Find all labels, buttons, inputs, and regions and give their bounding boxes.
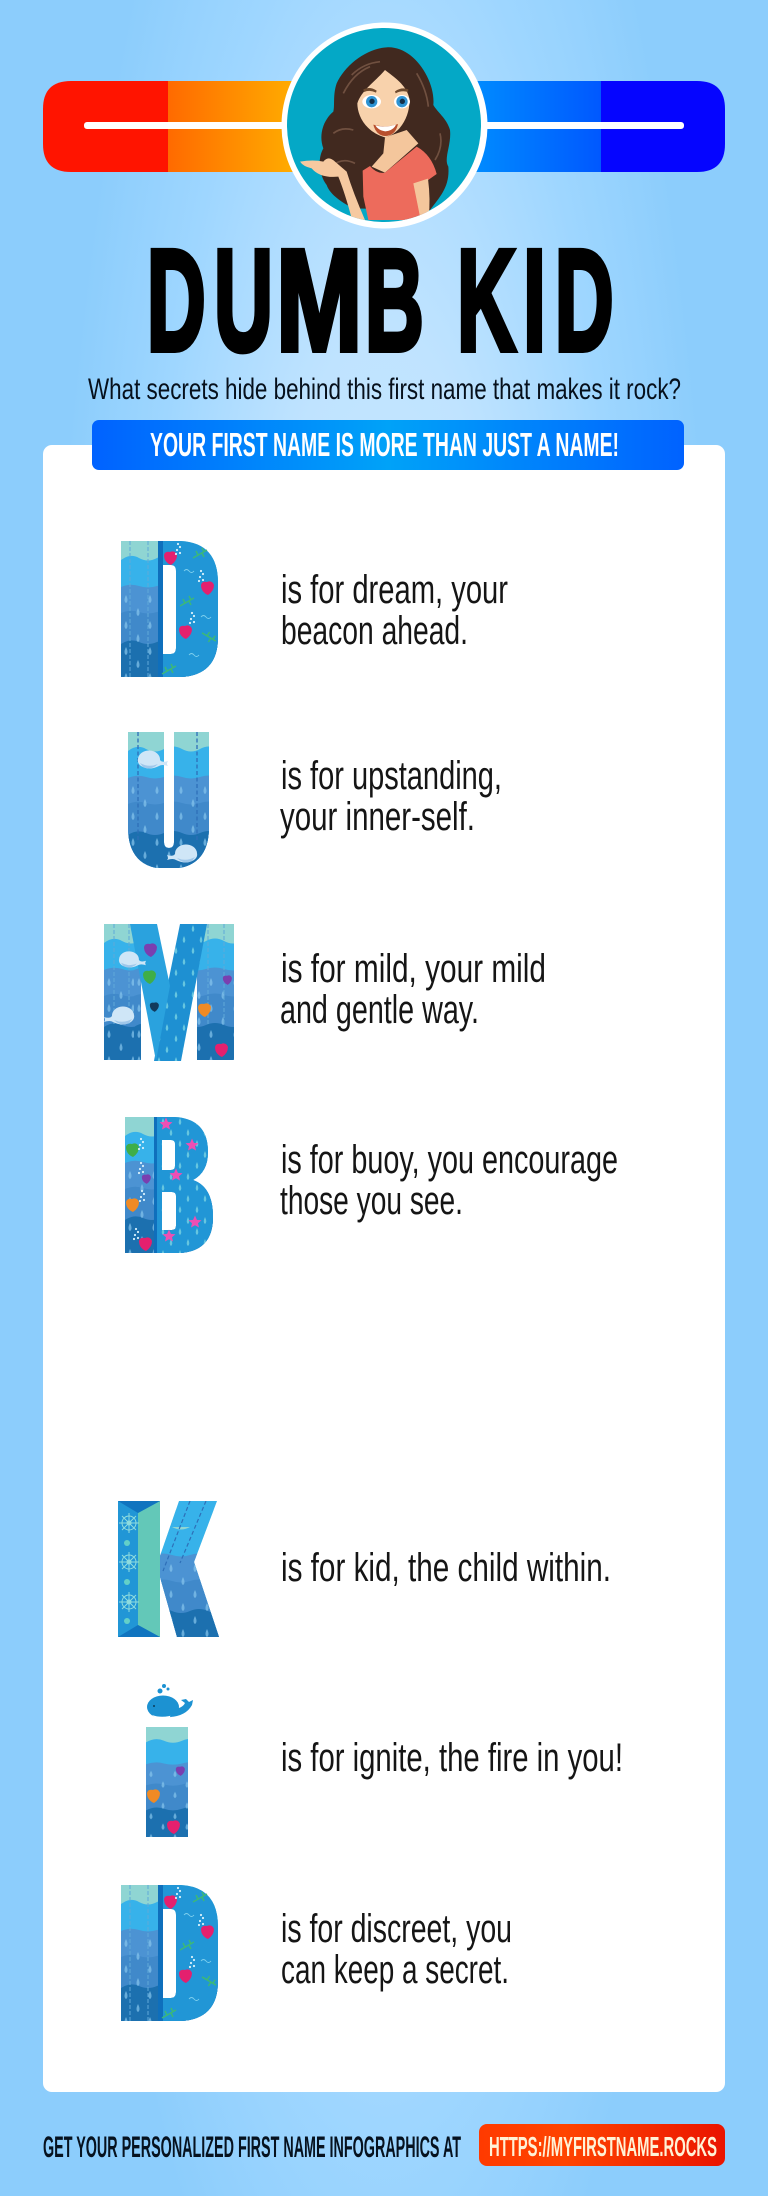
text: buoy: is for buoy, you encourage xyxy=(281,1138,618,1182)
row: letter B xyxy=(125,1117,618,1253)
banner: background xyxy=(92,420,684,470)
row: letter U xyxy=(128,732,502,868)
row: letter I xyxy=(146,1684,623,1837)
text: upstanding line 2: your inner-self. xyxy=(280,795,475,839)
title: DU xyxy=(147,219,273,381)
I stem xyxy=(146,1727,286,1837)
letter D second xyxy=(121,1885,261,2021)
whale above I xyxy=(147,1684,193,1719)
header colour bar xyxy=(43,81,725,172)
text: dream: is for dream, your xyxy=(281,568,508,612)
bar: white line xyxy=(84,122,684,129)
avatar portrait xyxy=(282,22,488,228)
bar: blue segment xyxy=(470,81,601,172)
avatar: white ring xyxy=(282,22,488,228)
row: letter D (second) xyxy=(121,1885,512,2021)
text: buoy line 2: those you see. xyxy=(280,1179,463,1223)
row: letter M xyxy=(104,924,546,1061)
bar: orange segment xyxy=(168,81,298,172)
row: letter D xyxy=(121,541,508,677)
bar: red segment xyxy=(43,81,168,172)
text: discreet: is for discreet, you xyxy=(281,1907,512,1951)
title: M xyxy=(276,219,362,381)
avatar: woman illustration xyxy=(283,27,483,227)
text: dream line 2: beacon ahead. xyxy=(281,609,468,653)
row: letter K xyxy=(118,1501,611,1646)
text: upstanding: is for upstanding, xyxy=(281,754,502,798)
footer button xyxy=(479,2124,725,2166)
letter I xyxy=(146,1684,286,1837)
letter K xyxy=(118,1501,219,1637)
title: B KID xyxy=(365,219,614,381)
text: ignite: is for ignite, the fire in you! xyxy=(281,1736,623,1780)
text: mild line 2: and gentle way. xyxy=(280,988,479,1032)
bar: dark blue segment xyxy=(601,81,725,172)
letter D xyxy=(121,541,261,677)
button background xyxy=(479,2124,725,2166)
letter M xyxy=(104,924,234,1061)
text: discreet line 2: can keep a secret. xyxy=(281,1948,509,1992)
panel: white card xyxy=(43,445,725,2092)
letter U xyxy=(128,732,209,868)
text: kid: is for kid, the child within. xyxy=(281,1546,611,1590)
text: mild: is for mild, your mild xyxy=(281,947,546,991)
letter B xyxy=(125,1117,213,1253)
banner xyxy=(92,420,684,470)
